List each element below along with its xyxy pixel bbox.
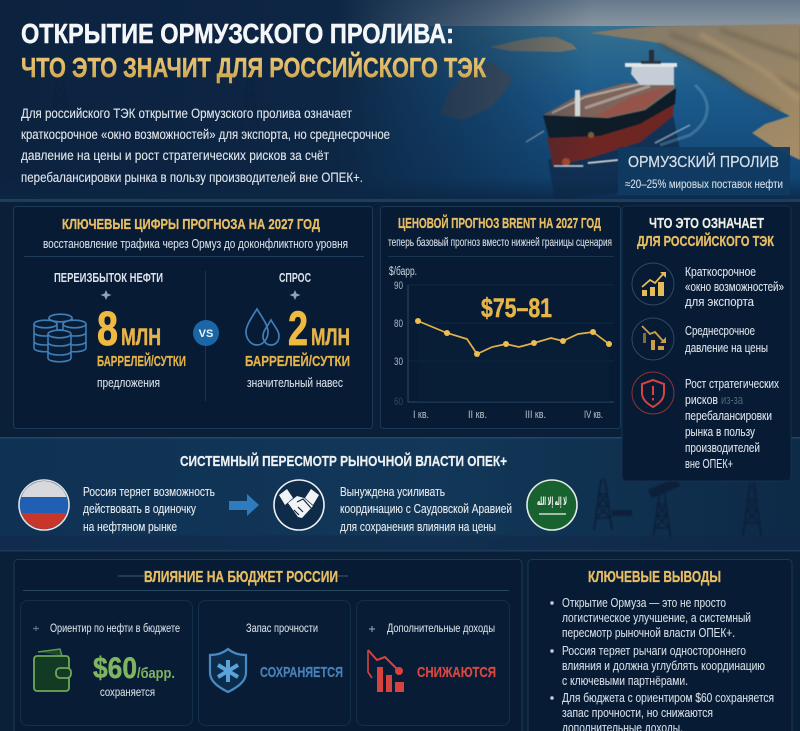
oversupply column: МЛН [121, 324, 161, 351]
card: budget oil benchmark [20, 600, 192, 726]
text: Russia loses ability: действовать в одиночку [83, 502, 197, 516]
panel: budget impact [14, 560, 522, 731]
icon: Russian flag [19, 480, 69, 531]
panel heading: КЛЮЧЕВЫЕ ЦИФРЫ ПРОГНОЗА НА 2027 ГОД [62, 216, 320, 233]
icon: Saudi flag [527, 480, 577, 530]
oversupply column: 8 [97, 303, 118, 356]
oversupply column: ПЕРЕИЗБЫТОК НЕФТИ [54, 271, 163, 285]
intro text block: давление на цены и рост стратегических рисков за счёт [21, 148, 329, 163]
text: forced coordination: координацию с Саудовской Аравией [340, 502, 512, 516]
intro text block [21, 106, 390, 185]
card: budget oil benchmark: /барр. [137, 665, 175, 682]
intro text block: Для российского ТЭК открытие Ормузского пролива означает [21, 106, 352, 121]
item: strategic risks: производителей [685, 441, 760, 455]
icon: handshake [274, 480, 324, 530]
bullet list: логистическое улучшение, а системный [562, 611, 751, 625]
strait label callout [618, 147, 790, 195]
item: short-term window [632, 263, 784, 309]
bullet list [550, 596, 774, 731]
panel subheading: восстановление трафика через Ормуз до доконфликтного уровня [43, 237, 348, 251]
item: strategic risks: рисков [685, 393, 718, 407]
item: strategic risks: из-за [721, 393, 743, 407]
panel heading: ЦЕНОВОЙ ПРОГНОЗ BRENT НА 2027 ГОД [398, 214, 601, 232]
demand column: БАРРЕЛЕЙ/СУТКИ [245, 352, 350, 370]
item: strategic risks [632, 372, 780, 471]
item: strategic risks: рынка в пользу [685, 425, 756, 439]
card: safety margin [198, 600, 350, 726]
title: ЧТО ЭТО ЗНАЧИТ ДЛЯ РОССИЙСКОГО ТЭК [21, 51, 487, 83]
icon: Saudi flag: لا إله إلا الله [537, 496, 567, 508]
card: additional revenue [356, 600, 510, 726]
item: short-term window: для экспорта [685, 295, 754, 309]
faint derricks behind intro text [51, 70, 259, 130]
OPEC+ band [0, 437, 800, 552]
item: mid-term price pressure [632, 318, 768, 360]
line chart: IV кв. [584, 409, 603, 421]
card: budget oil benchmark: $60 [93, 652, 137, 685]
bullet list: запас прочности, но снижаются [562, 706, 713, 720]
icon: oil barrels [34, 314, 86, 362]
icon: wallet [34, 649, 71, 691]
line chart [389, 266, 614, 421]
line chart: $75–81 [481, 293, 552, 323]
item: mid-term price pressure: давление на цены [685, 341, 768, 355]
oversupply column: предложения [97, 376, 160, 390]
panel: Brent price forecast [380, 206, 620, 428]
card: budget oil benchmark: сохраняется [100, 685, 155, 699]
line chart: $/барр. [389, 266, 417, 278]
bullet list: Открытие Ормуза — это не просто [562, 596, 726, 610]
demand column: СПРОС [279, 271, 311, 285]
item: strategic risks: перебалансировки [685, 409, 772, 423]
hero photo: tanker in Strait of Hormuz [0, 0, 800, 200]
panel heading [637, 216, 774, 250]
card: safety margin: СОХРАНЯЕТСЯ [260, 664, 343, 681]
arrow [229, 494, 259, 516]
line chart: 60 [394, 396, 403, 408]
text: Russia loses ability: Россия теряет возможность [83, 485, 215, 499]
panel: what it means [622, 206, 791, 481]
panel heading: ВЛИЯНИЕ НА БЮДЖЕТ РОССИИ [144, 569, 338, 586]
bullet list: пересмотр рыночной власти ОПЕК+. [562, 626, 735, 640]
icon: shield [210, 649, 246, 692]
panel heading: КЛЮЧЕВЫЕ ВЫВОДЫ [588, 569, 721, 586]
item: strategic risks: Рост стратегических [685, 377, 780, 391]
text: Russia loses ability: на нефтяном рынке [83, 520, 177, 534]
card: additional revenue: Дополнительные доходы [387, 621, 495, 635]
panel subheading: теперь базовый прогноз вместо нижней границы сценария [388, 235, 612, 249]
panel: key takeaways [528, 560, 792, 731]
item: short-term window: Краткосрочное [685, 265, 756, 279]
panel: key forecast figures [14, 206, 372, 428]
oversupply column: БАРРЕЛЕЙ/СУТКИ [97, 352, 186, 370]
VS badge: VS [199, 328, 213, 340]
card: budget oil benchmark: Ориентир по нефти в бюджете [50, 621, 180, 635]
line chart: III кв. [525, 409, 546, 421]
line chart: 90 [394, 280, 403, 292]
oversupply column [34, 271, 186, 390]
item: strategic risks: вне ОПЕК+ [685, 457, 733, 471]
VS badge [193, 320, 219, 346]
line chart: II кв. [468, 409, 487, 421]
strait label callout: ОРМУЗСКИЙ ПРОЛИВ [628, 152, 779, 171]
demand column: значительный навес [247, 376, 343, 390]
bullet list: Россия теряет рычаги одностороннего [562, 644, 746, 658]
icon: oil drops [246, 309, 279, 345]
card: safety margin: Запас прочности [246, 621, 318, 635]
card: additional revenue: СНИЖАЮТСЯ [417, 664, 496, 681]
bullet list: с ключевыми партнёрами. [562, 674, 688, 688]
title: ОТКРЫТИЕ ОРМУЗСКОГО ПРОЛИВА: [21, 18, 454, 49]
text: Russia loses ability [83, 485, 215, 534]
demand column: 2 [288, 303, 308, 356]
demand column [245, 271, 350, 390]
line chart: I кв. [413, 409, 429, 421]
text: forced coordination [340, 485, 512, 534]
intro text block: перебалансировки рынка в пользу производителей вне ОПЕК+. [21, 170, 363, 185]
line chart: 80 [394, 318, 403, 330]
text: forced coordination: Вынуждена усиливать [340, 485, 445, 499]
line chart: 30 [394, 356, 403, 368]
demand column: МЛН [311, 324, 350, 351]
text: forced coordination: для сохранения влияния на цены [340, 520, 496, 534]
title [21, 18, 487, 83]
OPEC+ section heading: СИСТЕМНЫЙ ПЕРЕСМОТР РЫНОЧНОЙ ВЛАСТИ ОПЕК+ [180, 452, 507, 470]
item: mid-term price pressure: Среднесрочное [685, 324, 755, 338]
panel heading: ЧТО ЭТО ОЗНАЧАЕТ [649, 216, 764, 232]
intro text block: краткосрочное «окно возможностей» для экспорта, но среднесрочное [21, 127, 390, 142]
icon: falling revenue chart [368, 650, 404, 692]
